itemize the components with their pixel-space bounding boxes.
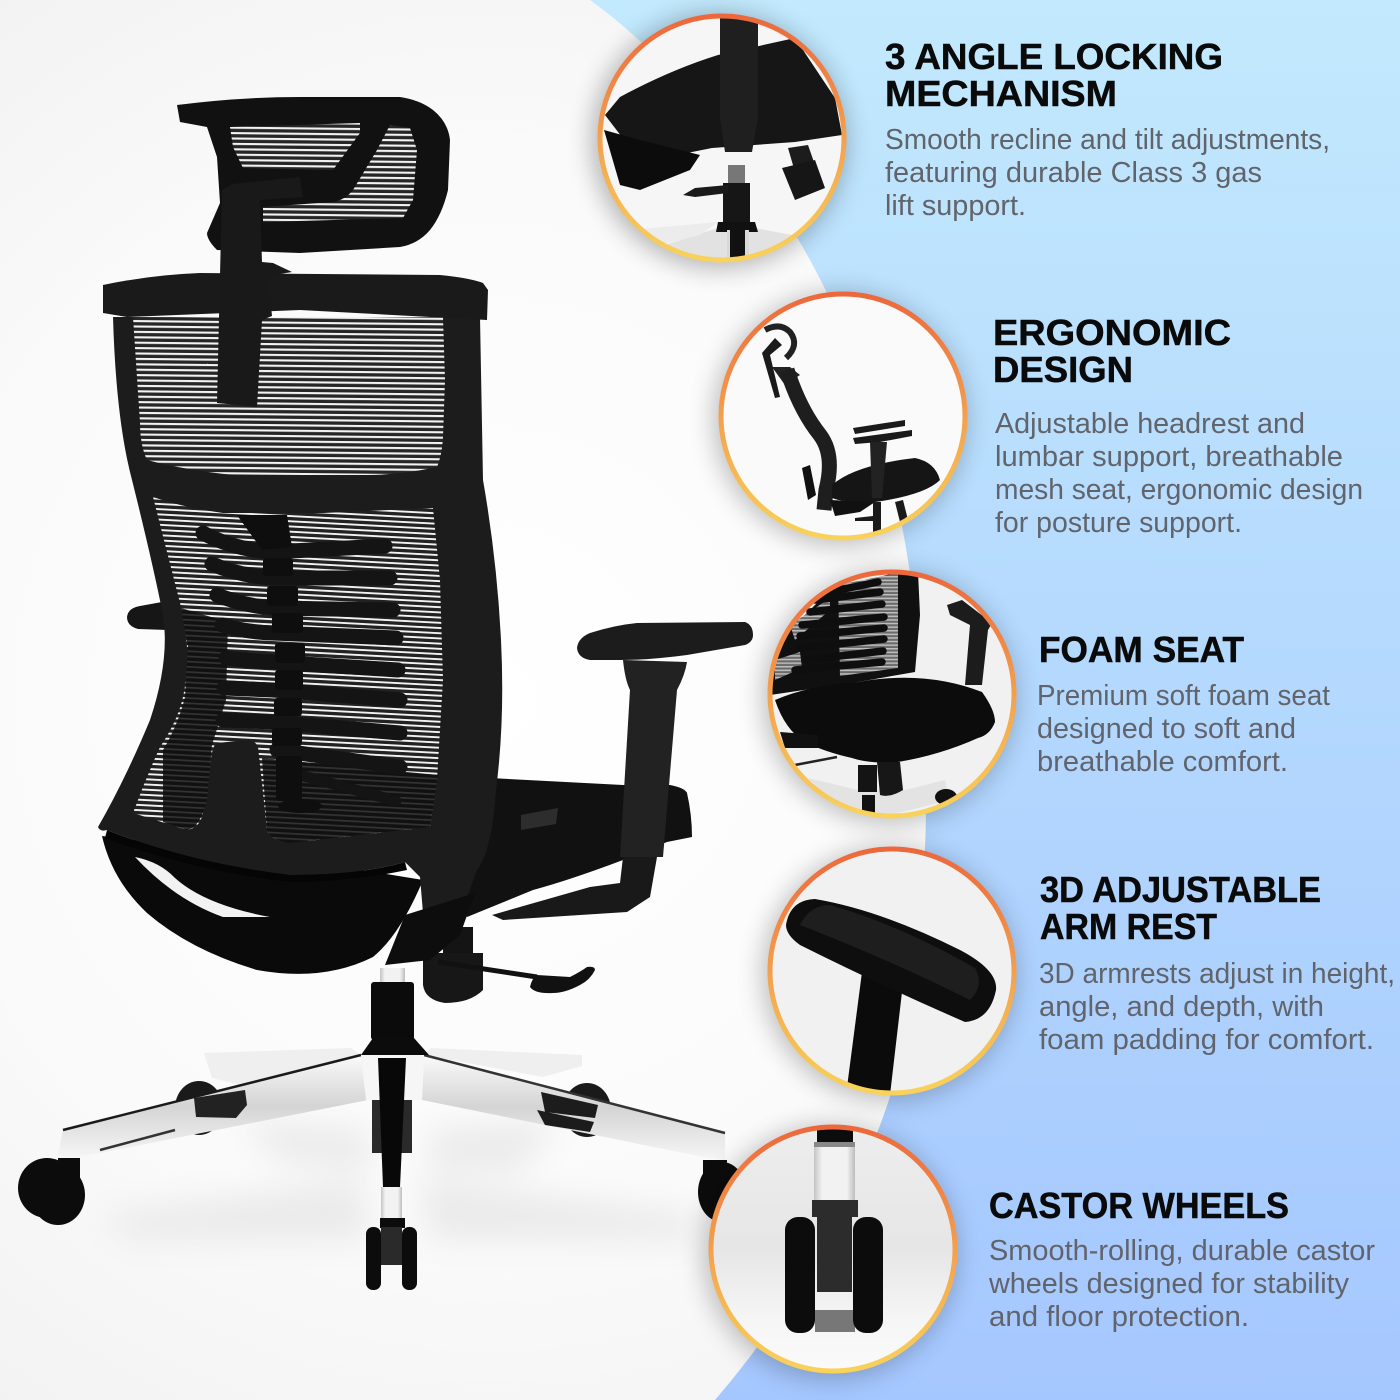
feature text: ergonomic design: lumbar support, breathable — [995, 441, 1343, 473]
feature text: foam seat: FOAM SEAT — [1039, 629, 1244, 670]
feature circle: angle locking mechanism — [593, 15, 845, 270]
feature circle: foam seat — [763, 571, 1015, 823]
seat loop under back — [102, 836, 423, 974]
lumbar spine blocks — [237, 515, 322, 813]
lower mesh — [133, 497, 443, 843]
frame lattice — [385, 893, 475, 965]
feature text: castor wheels: wheels designed for stability — [988, 1268, 1349, 1300]
feature text: 3D adjustable arm rest: 3D ADJUSTABLE — [1040, 869, 1321, 910]
feature text: 3 angle locking mechanism: MECHANISM — [885, 73, 1117, 114]
feature text: foam seat — [1037, 629, 1330, 778]
main product image: office chair rear view — [18, 97, 753, 1290]
right armrest — [492, 622, 753, 920]
upper mesh — [133, 317, 445, 475]
seat label — [521, 808, 558, 830]
lumbar ribs — [203, 533, 400, 801]
circle shadow — [763, 571, 1015, 823]
castor wheels — [18, 1158, 746, 1290]
gas lift lever and knob — [423, 927, 595, 1003]
circle shadow — [714, 293, 966, 545]
feature text: foam seat: Premium soft foam seat — [1037, 680, 1330, 712]
feature text: ergonomic design: ERGONOMIC — [993, 312, 1231, 353]
feature text: ergonomic design: DESIGN — [993, 349, 1133, 390]
circle shadow — [593, 15, 845, 267]
feature text: 3 angle locking mechanism: lift support. — [885, 190, 1026, 222]
feature text: castor wheels: and floor protection. — [989, 1301, 1249, 1333]
feature circle: castor wheels — [704, 1126, 956, 1378]
feature text: foam seat: designed to soft and — [1037, 713, 1296, 745]
feature text: castor wheels — [988, 1185, 1375, 1333]
circle shadow — [763, 848, 1015, 1100]
feature text: foam seat: breathable comfort. — [1037, 746, 1288, 778]
black band under frame — [105, 830, 407, 882]
feature text: 3D adjustable arm rest — [1039, 869, 1395, 1056]
base star — [58, 968, 725, 1218]
dark mesh over seat and armrest — [163, 608, 438, 843]
headrest — [177, 97, 450, 253]
feature text: 3 angle locking mechanism: featuring durable Class 3 gas — [885, 157, 1262, 189]
feature text: 3D adjustable arm rest: foam padding for comfort. — [1039, 1024, 1374, 1056]
feature text: castor wheels: CASTOR WHEELS — [989, 1185, 1289, 1226]
feature text: 3D adjustable arm rest: angle, and depth, with — [1039, 991, 1324, 1023]
white gap in loop — [135, 857, 270, 917]
circle shadow — [704, 1126, 956, 1378]
feature text: 3 angle locking mechanism: Smooth recline and tilt adjustments, — [885, 124, 1330, 156]
feature text: ergonomic design: Adjustable headrest and — [995, 408, 1305, 440]
seat — [440, 778, 692, 917]
feature text: 3D adjustable arm rest: 3D armrests adjust in height, — [1039, 958, 1395, 990]
feature text: ergonomic design: mesh seat, ergonomic design — [995, 474, 1363, 506]
feature text: ergonomic design — [993, 312, 1363, 539]
feature text: ergonomic design: for posture support. — [995, 507, 1242, 539]
feature text: 3 angle locking mechanism: 3 ANGLE LOCKING — [885, 36, 1223, 77]
feature text: castor wheels: Smooth-rolling, durable castor — [989, 1235, 1375, 1267]
feature text: 3D adjustable arm rest: ARM REST — [1040, 906, 1217, 947]
top bar — [103, 273, 488, 320]
back frame — [98, 317, 502, 925]
floor shadows — [100, 1120, 700, 1240]
headrest post — [217, 177, 303, 407]
left armrest stub — [127, 602, 168, 630]
feature circle: 3D arm rest — [763, 848, 1015, 1100]
feature circle: ergonomic design — [714, 293, 966, 545]
feature text: 3 angle locking mechanism — [885, 36, 1330, 222]
